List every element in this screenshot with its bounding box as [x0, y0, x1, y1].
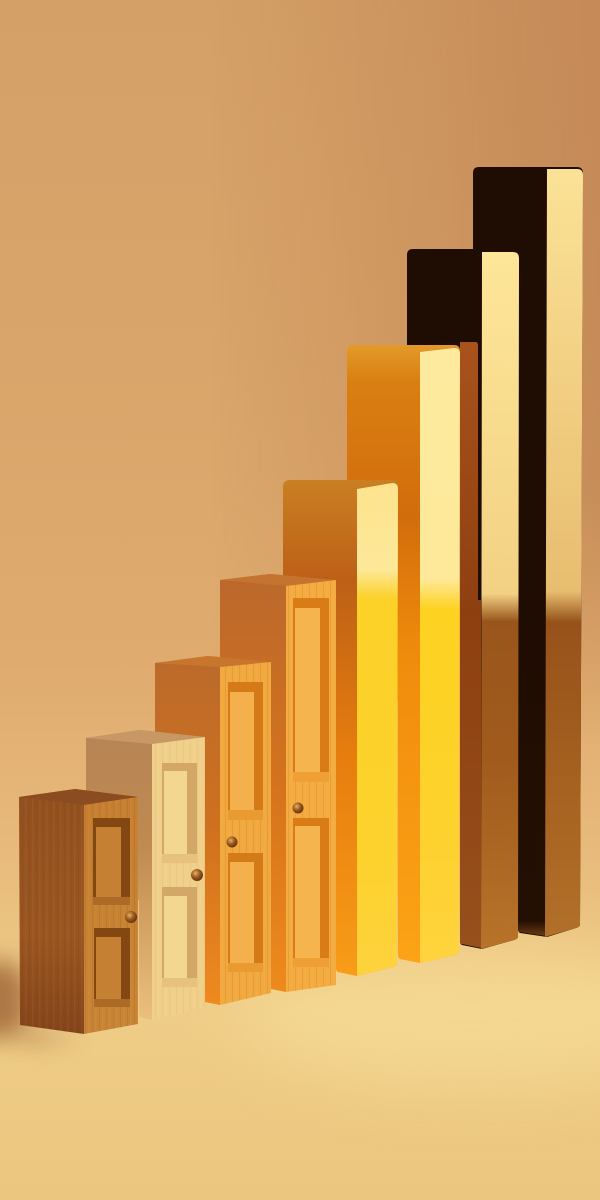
door panels [162, 763, 197, 987]
door knob [191, 869, 203, 881]
bar 2: pale wood door column [86, 730, 205, 1020]
bar 7: dark glossy column [407, 249, 519, 949]
bar 5: yellow column [283, 480, 398, 976]
bar 3: door column [155, 656, 271, 1005]
door panels [293, 598, 329, 967]
bar 6: yellow column [347, 345, 460, 963]
bar 8: tallest dark glossy column [473, 167, 583, 937]
door panels [228, 682, 263, 972]
door knob [292, 802, 304, 814]
door panels [93, 818, 130, 1007]
bar 4: door column [220, 574, 336, 992]
door knob [226, 836, 238, 848]
door knob [125, 911, 137, 923]
bar 1: brown wood door column [19, 789, 138, 1034]
